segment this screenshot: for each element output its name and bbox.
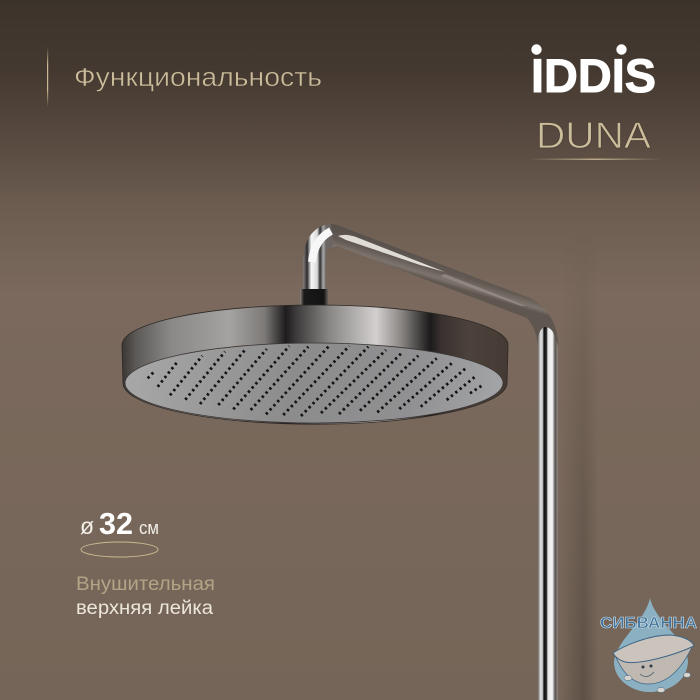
neck and bend [314, 235, 332, 292]
tub rim [613, 635, 694, 663]
shower rail: arm and vertical pipe [312, 224, 558, 700]
arm highlight [338, 235, 445, 272]
heading: Функциональность [74, 64, 322, 92]
water drop [614, 598, 688, 692]
tub face [640, 664, 654, 677]
arm reflection near bend [440, 274, 526, 306]
tub body [615, 647, 692, 684]
series underline [528, 159, 662, 160]
wordmark: СИБВАННА [600, 615, 697, 632]
diameter ellipse [81, 542, 158, 557]
caption line one: Внушительная [76, 574, 215, 595]
caption line two: верхняя лейка [76, 598, 213, 619]
diameter value [80, 507, 159, 541]
face plate [125, 343, 503, 423]
spray nozzles [148, 345, 482, 416]
outer rim [122, 305, 508, 424]
watermark logo [600, 598, 697, 692]
unit: см [139, 518, 159, 538]
brand logo: IDDIS [531, 49, 656, 102]
neck collar [300, 289, 328, 306]
series name: DUNA [536, 115, 651, 156]
tub feet [624, 672, 690, 692]
number: 32 [99, 507, 133, 541]
accent line [47, 47, 48, 107]
diameter symbol: ø [80, 513, 94, 539]
vertical pipe [538, 327, 558, 700]
bend highlight [312, 231, 331, 262]
shower head [122, 289, 508, 424]
arm tube [326, 224, 558, 345]
